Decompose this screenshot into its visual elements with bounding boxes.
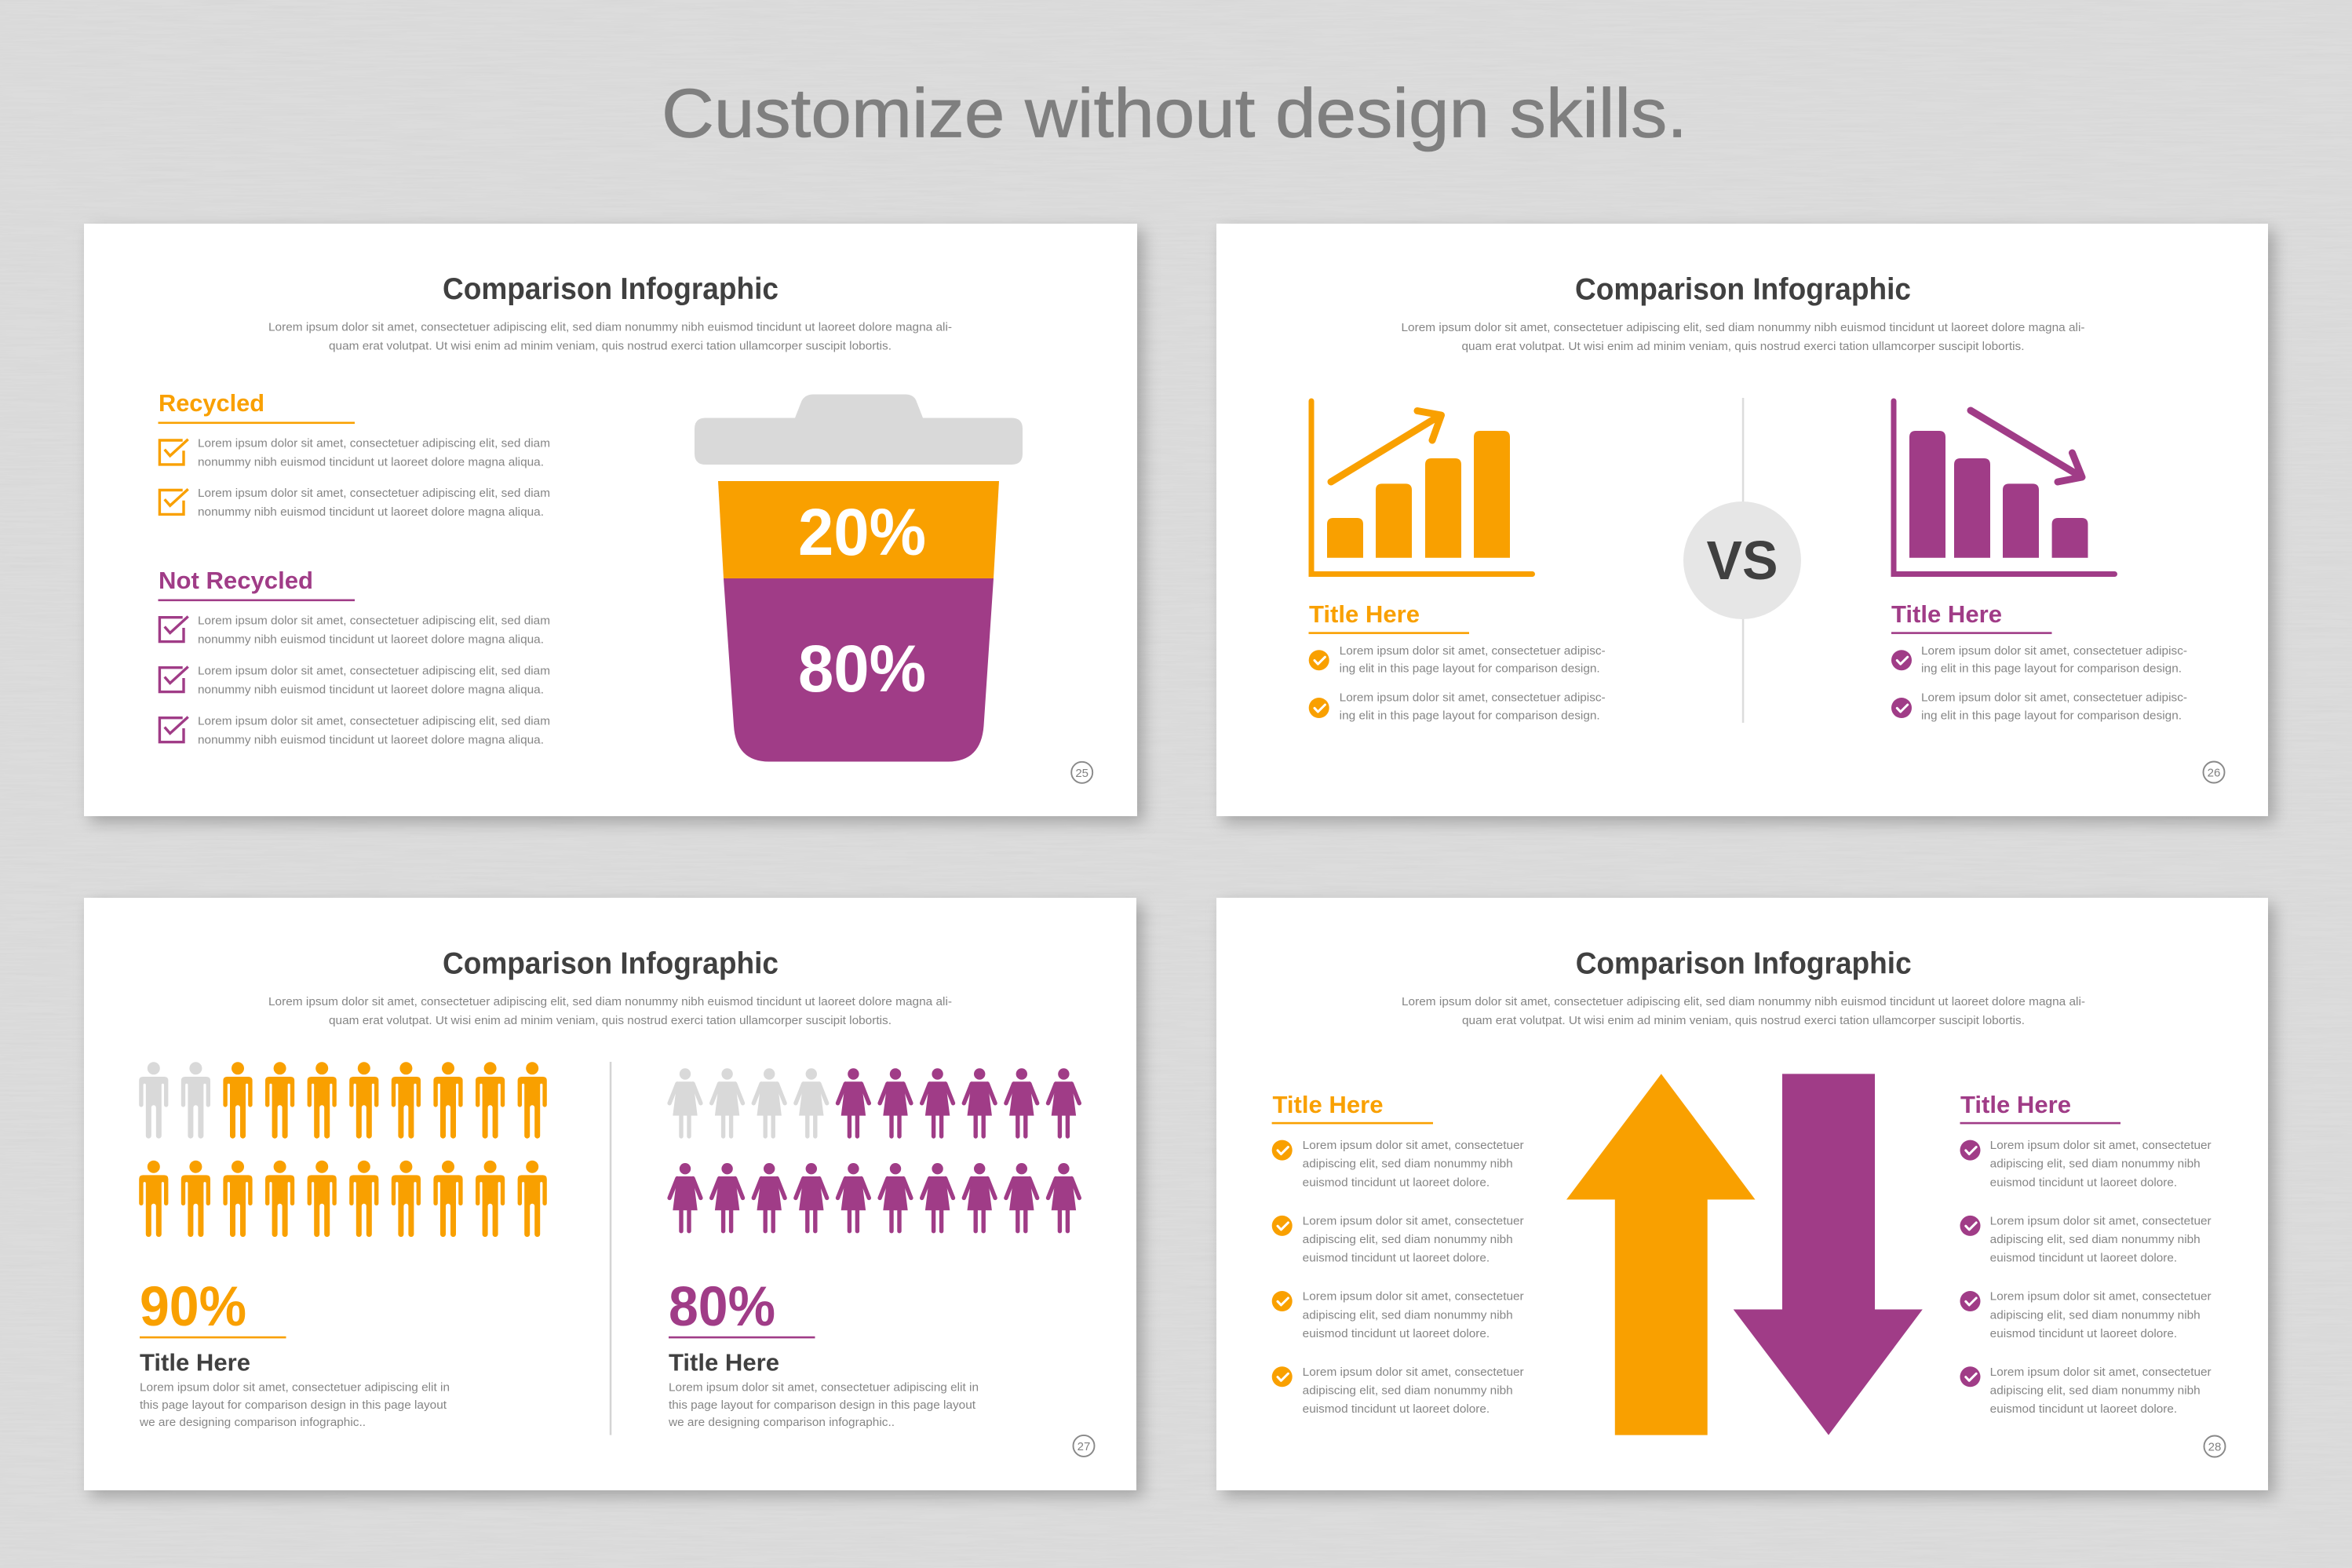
pictogram: men 90 percent xyxy=(139,1062,547,1237)
checklist: right points: euismod tincidunt ut laoreet dolore. xyxy=(1990,1253,2177,1265)
checklist: right points: Lorem ipsum dolor sit amet, consectetuer xyxy=(1990,1140,2212,1152)
checklist: right points: euismod tincidunt ut laoreet dolore. xyxy=(1990,1403,2177,1416)
checklist: right points: euismod tincidunt ut laoreet dolore. xyxy=(1990,1176,2177,1189)
slide title: Comparison Infographic xyxy=(443,272,779,306)
checklist: left points: euismod tincidunt ut laoreet dolore. xyxy=(1303,1176,1490,1189)
checklist: right points: adipiscing elit, sed diam nonummy nibh xyxy=(1990,1158,2201,1171)
checklist: left points: Lorem ipsum dolor sit amet, consectetuer xyxy=(1303,1140,1524,1152)
arrow: up xyxy=(1566,1074,1755,1435)
checklist: Recycled items: nonummy nibh euismod tincidunt ut laoreet dolore magna aliqua. xyxy=(198,456,544,469)
checklist: right points: Lorem ipsum dolor sit amet, consectetuer xyxy=(1990,1366,2212,1379)
checklist: right points: ing elit in this page layout for comparison design. xyxy=(1921,663,2182,676)
panel: bar charts versus xyxy=(1216,224,2268,816)
checklist: Recycled items: Lorem ipsum dolor sit amet, consectetuer adipiscing elit, sed diam xyxy=(198,487,550,500)
icon: recycling bin chart xyxy=(695,394,1023,761)
checklist: Not Recycled items: nonummy nibh euismod tincidunt ut laoreet dolore magna aliqua. xyxy=(198,634,544,647)
slide intro text: Lorem ipsum dolor sit amet, consectetuer adipiscing elit, sed diam nonummy nibh euismod tincidunt ut laoreet dolore magna ali- xyxy=(1402,996,2085,1008)
checklist: right points: Lorem ipsum dolor sit amet, consectetuer xyxy=(1990,1291,2212,1304)
page number 25 xyxy=(1071,762,1092,783)
stat: 80 percent: 80% xyxy=(669,1276,775,1338)
vs divider and badge xyxy=(1683,398,1801,723)
checklist: right points: Lorem ipsum dolor sit amet, consectetuer adipisc- xyxy=(1921,645,2187,658)
slide intro text: Lorem ipsum dolor sit amet, consectetuer adipiscing elit, sed diam nonummy nibh euismod tincidunt ut laoreet dolore magna ali- xyxy=(268,322,952,334)
panel: up and down arrows xyxy=(1216,898,2268,1490)
checklist: right points: adipiscing elit, sed diam nonummy nibh xyxy=(1990,1385,2201,1398)
slide intro text xyxy=(268,996,952,1027)
checklist: left points xyxy=(1309,645,1606,722)
page number 27: 27 xyxy=(1078,1440,1090,1453)
checklist: Recycled items: Lorem ipsum dolor sit amet, consectetuer adipiscing elit, sed diam xyxy=(198,438,550,450)
checklist: right points: Lorem ipsum dolor sit amet, consectetuer adipisc- xyxy=(1921,692,2187,705)
heading: Recycled: Recycled xyxy=(159,390,264,417)
icon: recycling bin chart: 20% xyxy=(798,495,926,569)
chart: rising bars with arrow xyxy=(1311,401,1532,574)
text block: left title and description: Title Here xyxy=(140,1350,250,1377)
checklist: left points: adipiscing elit, sed diam nonummy nibh xyxy=(1303,1234,1513,1246)
text block: right title and description: Title Here xyxy=(669,1350,779,1377)
heading: right title: Title Here xyxy=(1891,601,2002,628)
page number 26: 26 xyxy=(2208,766,2220,780)
checklist: right points xyxy=(1891,645,2187,722)
text block: left title and description: we are designing comparison infographic.. xyxy=(139,1417,366,1429)
checklist: right points: adipiscing elit, sed diam nonummy nibh xyxy=(1990,1234,2201,1246)
checklist: left points: Lorem ipsum dolor sit amet, consectetuer xyxy=(1303,1291,1524,1304)
checklist: Not Recycled items: Lorem ipsum dolor sit amet, consectetuer adipiscing elit, sed diam xyxy=(198,665,550,678)
checklist: left points: ing elit in this page layout for comparison design. xyxy=(1340,709,1600,722)
slide intro text: Lorem ipsum dolor sit amet, consectetuer adipiscing elit, sed diam nonummy nibh euismod tincidunt ut laoreet dolore magna ali- xyxy=(268,996,952,1008)
checklist: Not Recycled items: nonummy nibh euismod tincidunt ut laoreet dolore magna aliqua. xyxy=(198,734,544,746)
checklist: left points: ing elit in this page layout for comparison design. xyxy=(1340,663,1600,676)
checklist: Not Recycled items: Lorem ipsum dolor sit amet, consectetuer adipiscing elit, sed diam xyxy=(198,615,550,628)
stat: 90 percent: 90% xyxy=(140,1276,246,1338)
main heading: Customize without design skills. xyxy=(662,74,1687,152)
checklist: left points: Lorem ipsum dolor sit amet, consectetuer xyxy=(1303,1366,1524,1379)
checklist: right points: ing elit in this page layout for comparison design. xyxy=(1921,709,2182,722)
text block: left title and description: this page layout for comparison design in this page layout xyxy=(140,1399,447,1412)
checklist: Not Recycled items: Lorem ipsum dolor sit amet, consectetuer adipiscing elit, sed diam xyxy=(198,716,550,728)
checklist: left points: Lorem ipsum dolor sit amet, consectetuer adipisc- xyxy=(1340,692,1606,705)
slide title: Comparison Infographic xyxy=(1576,947,1912,981)
pictogram: women 80 percent xyxy=(669,1068,1079,1233)
slide title: Comparison Infographic xyxy=(443,946,779,981)
slide intro text: quam erat volutpat. Ut wisi enim ad minim veniam, quis nostrud exerci tation ullamcorper suscipit lobortis. xyxy=(1461,341,2025,353)
checklist: Not Recycled items: nonummy nibh euismod tincidunt ut laoreet dolore magna aliqua. xyxy=(198,684,544,696)
checklist: right points: adipiscing elit, sed diam nonummy nibh xyxy=(1990,1309,2201,1322)
checklist: right points: euismod tincidunt ut laoreet dolore. xyxy=(1990,1328,2177,1340)
slide title: Comparison Infographic xyxy=(1575,273,1911,306)
icon: recycling bin chart: 80% xyxy=(798,632,926,706)
checklist: Recycled items: nonummy nibh euismod tincidunt ut laoreet dolore magna aliqua. xyxy=(198,506,544,519)
arrow: down xyxy=(1734,1074,1923,1435)
panel: people pictograms xyxy=(84,898,1136,1490)
text block: left title and description: Lorem ipsum dolor sit amet, consectetuer adipiscing elit in xyxy=(140,1382,450,1395)
text block: right title and description: we are designing comparison infographic.. xyxy=(668,1417,895,1429)
checklist: left points: euismod tincidunt ut laoreet dolore. xyxy=(1303,1328,1490,1340)
checklist: left points xyxy=(1272,1140,1524,1416)
page number 28 xyxy=(2204,1436,2226,1457)
checklist: left points: Lorem ipsum dolor sit amet, consectetuer xyxy=(1303,1215,1524,1227)
checklist: left points: Lorem ipsum dolor sit amet, consectetuer adipisc- xyxy=(1340,645,1606,658)
slide intro text xyxy=(268,322,952,353)
page number 28: 28 xyxy=(2208,1441,2221,1453)
heading: right title: Title Here xyxy=(1960,1092,2071,1118)
text block: right title and description xyxy=(668,1350,979,1429)
slide intro text: Lorem ipsum dolor sit amet, consectetuer adipiscing elit, sed diam nonummy nibh euismod tincidunt ut laoreet dolore magna ali- xyxy=(1402,322,2085,334)
checklist: right points xyxy=(1960,1140,2212,1416)
text block: right title and description: this page layout for comparison design in this page layout xyxy=(669,1399,975,1412)
text block: left title and description xyxy=(139,1350,450,1429)
checklist: Recycled items xyxy=(159,438,550,519)
text block: right title and description: Lorem ipsum dolor sit amet, consectetuer adipiscing elit in xyxy=(669,1382,979,1395)
page number 25: 25 xyxy=(1075,767,1088,780)
vs divider and badge: VS xyxy=(1706,530,1778,591)
heading: Not Recycled: Not Recycled xyxy=(159,567,313,594)
slide intro text: quam erat volutpat. Ut wisi enim ad minim veniam, quis nostrud exerci tation ullamcorper suscipit lobortis. xyxy=(329,1015,892,1027)
checklist: Not Recycled items xyxy=(159,615,550,746)
slide intro text xyxy=(1402,996,2085,1027)
slide intro text: quam erat volutpat. Ut wisi enim ad minim veniam, quis nostrud exerci tation ullamcorper suscipit lobortis. xyxy=(1462,1015,2025,1027)
checklist: left points: adipiscing elit, sed diam nonummy nibh xyxy=(1303,1158,1513,1171)
checklist: left points: adipiscing elit, sed diam nonummy nibh xyxy=(1303,1385,1513,1398)
heading: left title: Title Here xyxy=(1309,601,1420,628)
page number 27 xyxy=(1074,1435,1094,1457)
checklist: left points: euismod tincidunt ut laoreet dolore. xyxy=(1303,1253,1490,1265)
slide intro text xyxy=(1402,322,2085,353)
checklist: left points: euismod tincidunt ut laoreet dolore. xyxy=(1303,1403,1490,1416)
checklist: left points: adipiscing elit, sed diam nonummy nibh xyxy=(1303,1309,1513,1322)
panel: recycling bin comparison xyxy=(84,224,1137,816)
heading: left title: Title Here xyxy=(1273,1092,1383,1118)
page number 26 xyxy=(2204,761,2224,783)
checklist: right points: Lorem ipsum dolor sit amet, consectetuer xyxy=(1990,1215,2212,1227)
chart: falling bars with arrow xyxy=(1894,401,2114,574)
slide intro text: quam erat volutpat. Ut wisi enim ad minim veniam, quis nostrud exerci tation ullamcorper suscipit lobortis. xyxy=(329,341,892,353)
